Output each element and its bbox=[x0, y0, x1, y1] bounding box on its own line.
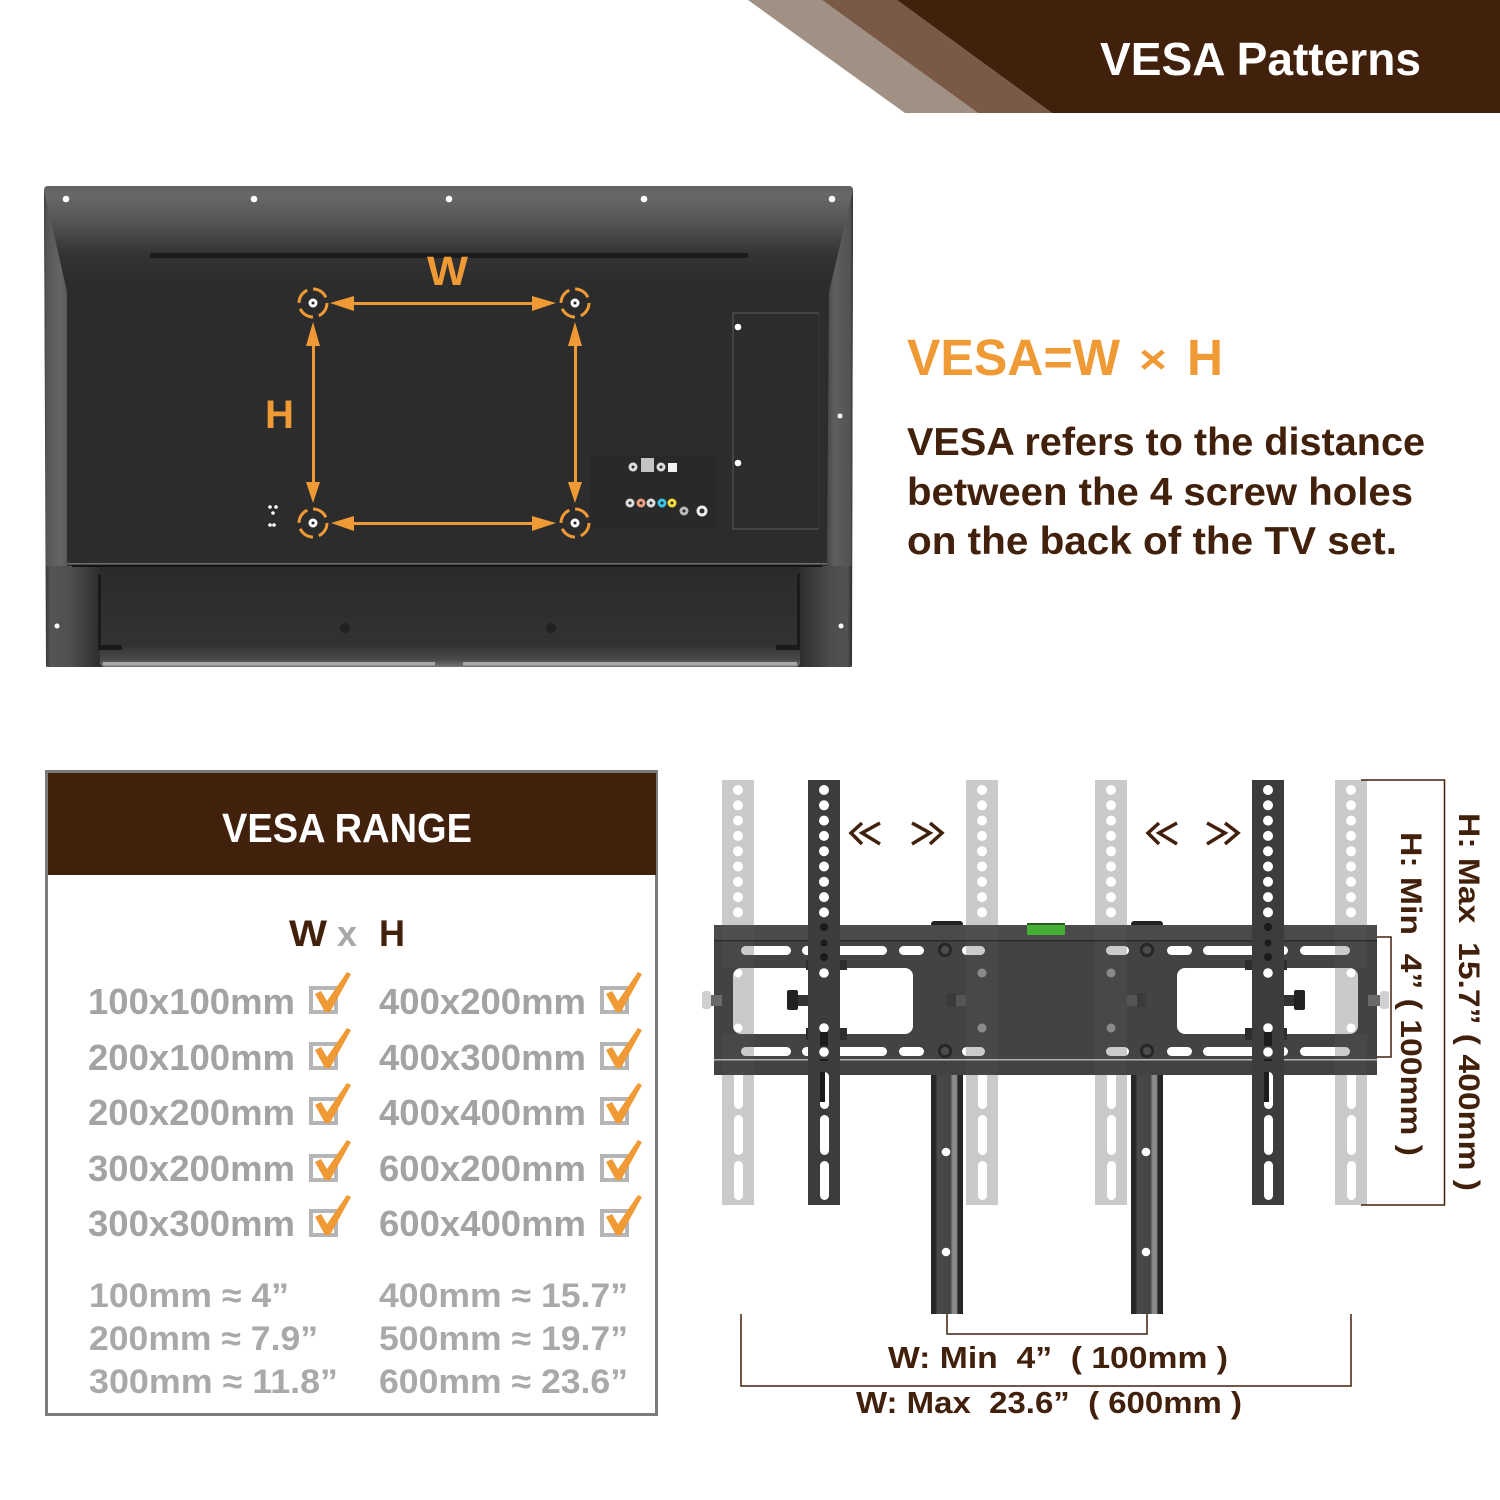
size list: 100x100mm bbox=[88, 981, 295, 1022]
heading: VESA Patterns: VESA Patterns bbox=[1100, 33, 1421, 85]
VESA description: on the back of the TV set. bbox=[907, 520, 1397, 563]
TV screw dots bbox=[54, 196, 844, 628]
size list: 400x300mm bbox=[379, 1037, 586, 1078]
panel heading: VESA RANGE bbox=[222, 805, 472, 851]
green spirit level bbox=[1027, 923, 1065, 935]
VESA screw holes bbox=[299, 289, 589, 537]
dimension: height brackets bbox=[1361, 780, 1485, 1205]
size list: 600x400mm bbox=[379, 1203, 586, 1244]
front rails bbox=[808, 780, 1284, 1205]
mm to inch conversions: 100mm ≈ 4” bbox=[89, 1277, 289, 1315]
label: W: W bbox=[427, 248, 468, 294]
mm to inch conversions bbox=[89, 1277, 628, 1401]
sliding direction arrows: left pair bbox=[851, 823, 942, 844]
support posts bbox=[931, 921, 1163, 1314]
header banner bbox=[748, 0, 1500, 113]
size list: 300x200mm bbox=[88, 1148, 295, 1189]
adjustment knobs bbox=[702, 960, 1389, 1040]
label: H: H bbox=[265, 393, 294, 437]
formula: VESA = W x H: × bbox=[1139, 338, 1167, 382]
mm to inch conversions: 500mm ≈ 19.7” bbox=[379, 1320, 628, 1358]
size list: 400x400mm bbox=[379, 1092, 586, 1133]
label: H max: H: Max 15.7” ( 400mm ) bbox=[1452, 813, 1485, 1191]
label: W min: W: Min 4” ( 100mm ) bbox=[888, 1340, 1228, 1375]
port panel bbox=[590, 455, 715, 529]
size list: 400x200mm bbox=[379, 981, 586, 1022]
formula: VESA = W x H: VESA=W bbox=[907, 329, 1121, 386]
column header: W x H: H bbox=[379, 913, 405, 954]
panel: VESA range bbox=[46, 772, 656, 1414]
size list bbox=[88, 981, 586, 1244]
column header: W x H: x bbox=[337, 913, 357, 954]
TV mount diagram bbox=[702, 780, 1389, 1314]
sliding direction arrows: right pair bbox=[1148, 823, 1238, 844]
label: H min: H: Min 4” ( 100mm ) bbox=[1394, 832, 1427, 1156]
size list: 200x100mm bbox=[88, 1037, 295, 1078]
dimension: width brackets bbox=[741, 1314, 1351, 1420]
VESA description: between the 4 screw holes bbox=[907, 471, 1413, 514]
TV back panel with measurement arrows bbox=[44, 186, 853, 667]
formula: VESA = W x H bbox=[907, 329, 1223, 386]
VESA description: VESA refers to the distance bbox=[907, 421, 1425, 464]
column header: W x H: W bbox=[289, 913, 327, 954]
size list: 200x200mm bbox=[88, 1092, 295, 1133]
size list: 600x200mm bbox=[379, 1148, 586, 1189]
faded extended rails bbox=[722, 780, 1367, 1205]
mm to inch conversions: 200mm ≈ 7.9” bbox=[89, 1320, 318, 1358]
mm to inch conversions: 400mm ≈ 15.7” bbox=[379, 1277, 628, 1315]
column header: W x H bbox=[289, 913, 405, 954]
VESA description bbox=[907, 421, 1425, 563]
checkbox icons bbox=[311, 972, 642, 1235]
wall plate bbox=[714, 925, 1377, 1075]
label: W max: W: Max 23.6” ( 600mm ) bbox=[856, 1385, 1242, 1420]
size list: 300x300mm bbox=[88, 1203, 295, 1244]
cover plate outline bbox=[733, 313, 819, 529]
mm to inch conversions: 300mm ≈ 11.8” bbox=[89, 1363, 338, 1401]
mm to inch conversions: 600mm ≈ 23.6” bbox=[379, 1363, 628, 1401]
formula: VESA = W x H: H bbox=[1187, 329, 1223, 386]
arrows: W and H bbox=[306, 296, 582, 531]
